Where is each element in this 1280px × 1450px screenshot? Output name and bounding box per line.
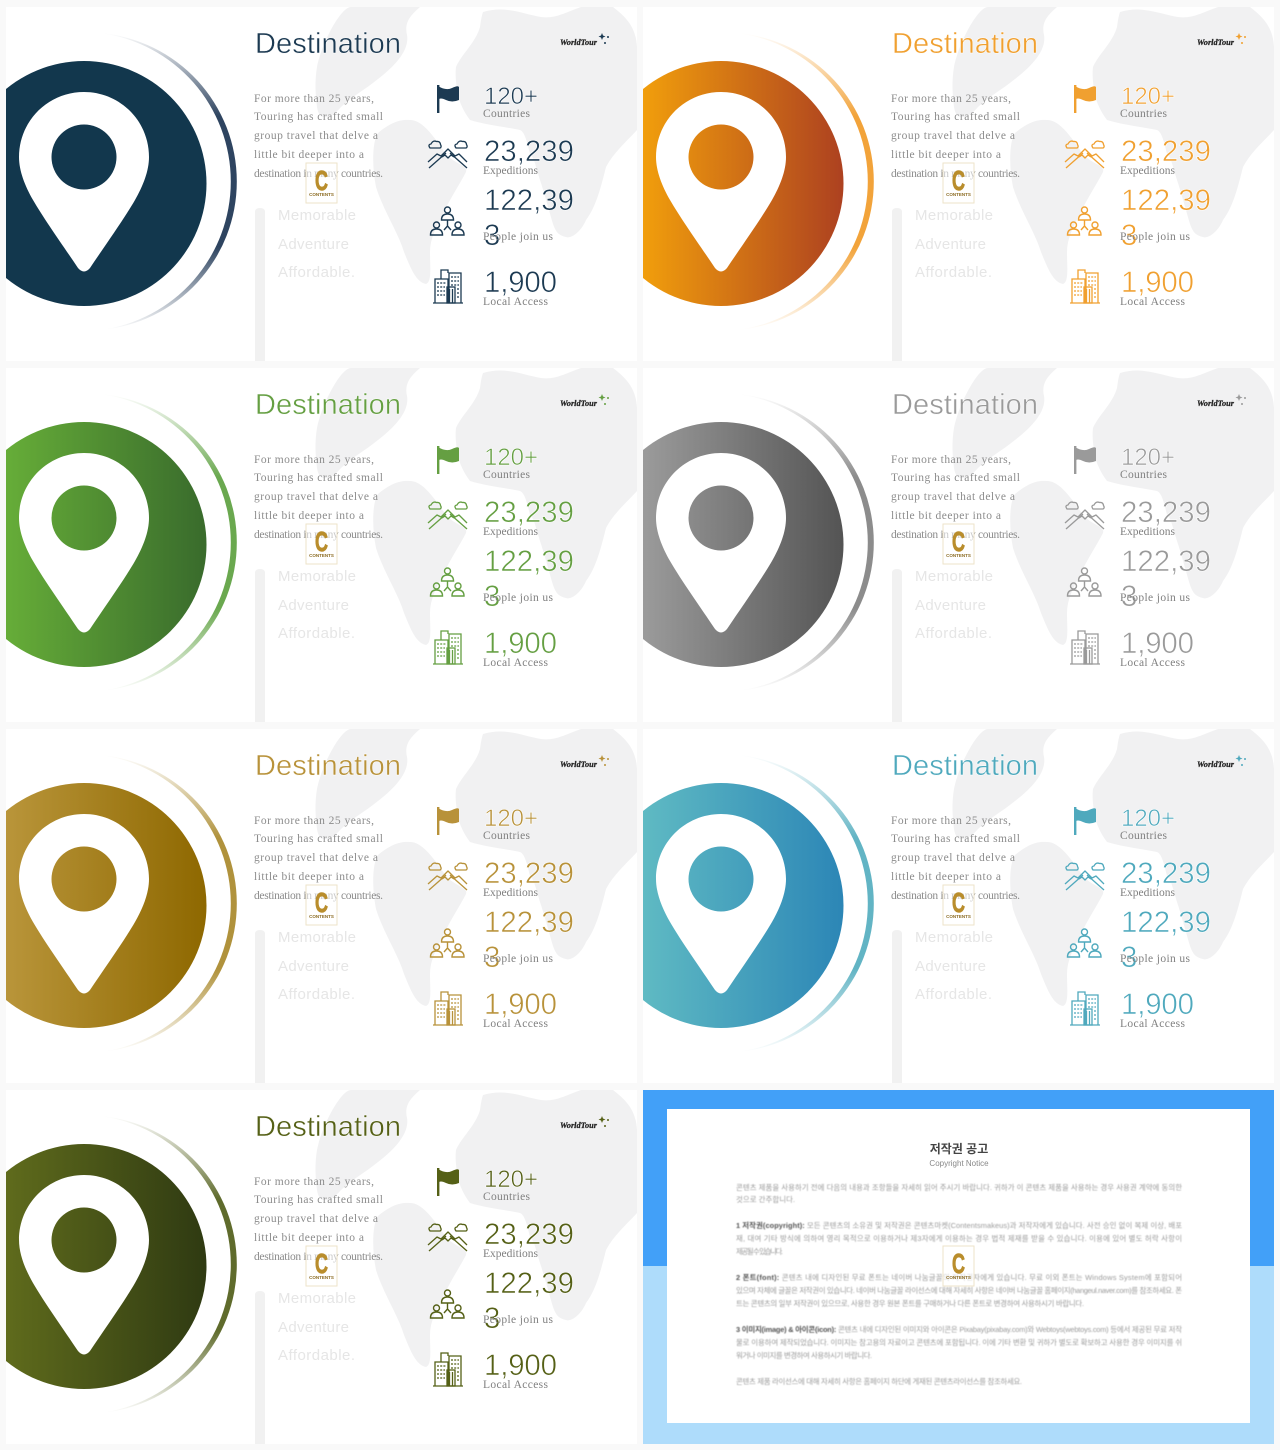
stat: people: People join us: [483, 592, 554, 604]
watermark badge: CONTENTS: [309, 192, 334, 197]
stat: local access: 1,900: [1121, 988, 1194, 1021]
stat: people: 122,39: [484, 906, 574, 939]
white notice card: [667, 1109, 1250, 1423]
stat: local access: Local Access: [483, 1379, 549, 1391]
stat: people: 3: [1121, 941, 1137, 974]
stat: expeditions: Expeditions: [483, 887, 539, 899]
section: image and icon: [736, 1325, 1182, 1360]
stat: countries: 120+: [484, 805, 538, 832]
stat: expeditions: [428, 857, 574, 899]
intro paragraph: group travel that delve a: [254, 852, 378, 864]
icon: map pin: [656, 453, 786, 632]
intro paragraph: Touring has crafted small: [254, 833, 383, 845]
intro paragraph: [891, 93, 1020, 180]
brand logo: [1197, 394, 1246, 408]
brand logo: WorldTour: [560, 399, 598, 408]
keywords list: Affordable.: [915, 264, 992, 281]
stat: local access: [433, 266, 557, 308]
brand logo: WorldTour: [1197, 38, 1235, 47]
gradient circle: [0, 422, 206, 667]
closing line: 콘텐츠 제품 라이선스에 대해 자세히 사항은 홈페이지 하단에 게재된 콘텐츠라이선스를 참조하세요.: [736, 1377, 1022, 1386]
keywords list: Adventure: [278, 236, 349, 253]
brand logo: [560, 755, 609, 769]
world map background: [316, 1090, 637, 1367]
stat: people: People join us: [1120, 592, 1191, 604]
crescent ring: [100, 755, 237, 1052]
stat: local access: [1070, 988, 1194, 1030]
watermark badge: CONTENTS: [946, 192, 971, 197]
intro notice: 콘텐츠 제품을 사용하기 전에 다음의 내용과 조항들을 자세히 읽어 주시기 바랍니다. 귀하가 이 콘텐츠 제품을 사용하는 경우 사용권 계약에 동의한: [736, 1183, 1182, 1192]
stat: local access: Local Access: [483, 296, 549, 308]
keywords list: Memorable: [278, 207, 356, 224]
watermark badge: [943, 524, 974, 564]
stat: countries: [1074, 805, 1175, 842]
keywords list: Adventure: [278, 597, 349, 614]
intro paragraph: little bit deeper into a: [254, 1232, 364, 1244]
icon: map pin: [656, 92, 786, 272]
intro paragraph: [891, 815, 1020, 902]
stat: local access: Local Access: [483, 657, 549, 669]
stat: countries: 120+: [1121, 444, 1175, 471]
keywords list: [915, 929, 993, 1003]
notice heading: 저작권 공고: [930, 1141, 988, 1156]
stat: expeditions: [1065, 135, 1211, 177]
stat: countries: [437, 1166, 538, 1203]
crescent ring: [737, 394, 874, 691]
stat: local access: 1,900: [484, 266, 557, 299]
keywords list: Memorable: [278, 568, 356, 585]
stat: local access: 1,900: [1121, 266, 1194, 299]
intro paragraph: destination in many countries.: [254, 1251, 383, 1263]
section: copyright: 1 저작권(copyright): 모든 콘텐츠의 소유권 및 저작권은 콘텐츠마켓(Contentsmakeus)과 저작자에게 있습니다. 사전 승인 없이 복제 이상, 배포: [736, 1221, 1182, 1230]
stat: people: 3: [484, 1302, 500, 1335]
gradient circle: [598, 422, 844, 667]
stat: local access: 1,900: [484, 988, 557, 1021]
stat: people: People join us: [1120, 231, 1191, 243]
title: Destination: [255, 389, 401, 421]
crescent ring: [100, 394, 237, 691]
watermark badge: [943, 885, 974, 925]
keywords list: Adventure: [278, 1319, 349, 1336]
keywords list: [278, 207, 356, 281]
intro paragraph: group travel that delve a: [254, 1213, 378, 1225]
brand logo: WorldTour: [1197, 399, 1235, 408]
world map background: [952, 368, 1274, 645]
panel: navy Destination slide: [6, 7, 637, 361]
stat: countries: Countries: [483, 830, 531, 842]
stat: people: 3: [484, 219, 500, 252]
intro paragraph: destination in many countries.: [254, 890, 383, 902]
keywords list: Adventure: [278, 958, 349, 975]
stat: local access: [433, 1349, 557, 1391]
stat: countries: Countries: [1120, 108, 1168, 120]
intro paragraph: destination in many countries.: [254, 529, 383, 541]
gradient circle: [0, 61, 206, 306]
stat: expeditions: [1065, 496, 1211, 538]
stat: expeditions: Expeditions: [483, 165, 539, 177]
brand logo: WorldTour: [1197, 760, 1235, 769]
intro paragraph: Touring has crafted small: [254, 472, 383, 484]
intro paragraph: destination in many countries.: [891, 529, 1020, 541]
side bar: [255, 208, 265, 361]
icon: map pin: [19, 453, 149, 632]
section: font: [736, 1273, 1182, 1308]
title: Destination: [892, 389, 1038, 421]
side bar: [255, 930, 265, 1083]
stat: people: People join us: [483, 1314, 554, 1326]
keywords list: Adventure: [915, 597, 986, 614]
brand logo: [1197, 755, 1246, 769]
intro paragraph: Touring has crafted small: [891, 472, 1020, 484]
intro paragraph: group travel that delve a: [891, 852, 1015, 864]
watermark badge: C: [952, 887, 965, 918]
keywords list: Affordable.: [915, 625, 992, 642]
intro paragraph: [254, 1176, 383, 1263]
stat: countries: [1074, 444, 1175, 481]
intro paragraph: For more than 25 years,: [254, 1176, 374, 1188]
stat: people: People join us: [483, 953, 554, 965]
intro paragraph: Touring has crafted small: [891, 833, 1020, 845]
blue upper band: [643, 1090, 1274, 1266]
intro paragraph: Touring has crafted small: [254, 111, 383, 123]
intro paragraph: [254, 815, 383, 902]
stat: expeditions: 23,239: [1121, 496, 1211, 529]
stat: people: [1068, 184, 1211, 252]
stat: people: [1068, 545, 1211, 613]
crescent ring: [100, 33, 237, 330]
stat: people: [430, 545, 574, 613]
intro paragraph: For more than 25 years,: [254, 93, 374, 105]
stat: people: [430, 184, 574, 252]
side bar: [892, 208, 902, 361]
stat: countries: Countries: [483, 469, 531, 481]
stat: expeditions: 23,239: [1121, 857, 1211, 890]
watermark badge: CONTENTS: [946, 553, 971, 558]
keywords list: [278, 929, 356, 1003]
section: font: 있으며 자체에 글꼴은 저작권이 있습니다. 네이버 나눔글꼴 라이선스에 대해 자세히 사항은 네이버 나눔글꼴 홈페이지(hangeul.naver.com)를 참조하세요. 폰: [736, 1286, 1182, 1295]
stat: expeditions: 23,239: [1121, 135, 1211, 168]
intro paragraph: destination in many countries.: [891, 890, 1020, 902]
keywords list: [915, 568, 993, 642]
stat: countries: 120+: [484, 1166, 538, 1193]
watermark badge: CONTENTS: [309, 914, 334, 919]
stat: expeditions: Expeditions: [483, 526, 539, 538]
icon: map pin: [19, 814, 149, 994]
stat: countries: 120+: [1121, 83, 1175, 110]
keywords list: Affordable.: [278, 625, 355, 642]
crescent ring: [100, 1116, 237, 1413]
stat: people: [430, 906, 574, 974]
intro paragraph: little bit deeper into a: [891, 149, 1001, 161]
section: image and icon: 물로 이용하여 제작되었습니다. 이미지는 참고용의 자료이고 콘텐츠에 포함됩니다. 이에 기타 변환 및 귀하가 별도로 확보하고 사용한 경우 이미지를 쉬: [736, 1338, 1182, 1347]
title: Destination: [255, 28, 401, 60]
keywords list: Affordable.: [278, 264, 355, 281]
stat: local access: 1,900: [1121, 627, 1194, 660]
stat: countries: 120+: [1121, 805, 1175, 832]
watermark badge: C: [315, 1248, 328, 1279]
keywords list: Memorable: [915, 929, 993, 946]
world map background: [316, 729, 637, 1006]
stat: local access: [1070, 266, 1194, 308]
stat: countries: Countries: [1120, 830, 1168, 842]
stat: people: People join us: [1120, 953, 1191, 965]
stat: expeditions: Expeditions: [483, 1248, 539, 1260]
watermark badge: [306, 1246, 337, 1286]
keywords list: [915, 207, 993, 281]
intro paragraph: Touring has crafted small: [891, 111, 1020, 123]
brand logo: [560, 33, 609, 47]
section: image and icon: 워거나 이미지를 변경하여 사용하시기 바랍니다.: [736, 1351, 872, 1360]
intro paragraph: destination in many countries.: [254, 168, 383, 180]
side bar: [255, 1291, 265, 1444]
intro paragraph: For more than 25 years,: [891, 454, 1011, 466]
keywords list: Affordable.: [915, 986, 992, 1003]
keywords list: Affordable.: [278, 986, 355, 1003]
intro paragraph: group travel that delve a: [254, 491, 378, 503]
intro paragraph: [891, 454, 1020, 541]
panel: gold Destination slide: [6, 729, 637, 1083]
gradient circle: [598, 61, 844, 306]
stat: people: 3: [484, 580, 500, 613]
panel: teal Destination slide: [643, 729, 1274, 1083]
stat: expeditions: [428, 496, 574, 538]
keywords list: Affordable.: [278, 1347, 355, 1364]
keywords list: Memorable: [915, 207, 993, 224]
gradient circle: [0, 783, 206, 1028]
intro paragraph: little bit deeper into a: [891, 871, 1001, 883]
stat: local access: Local Access: [483, 1018, 549, 1030]
stat: people: 122,39: [484, 184, 574, 217]
title: Destination: [255, 750, 401, 782]
stat: people: People join us: [483, 231, 554, 243]
world map background: [316, 368, 637, 645]
watermark badge: [306, 524, 337, 564]
section: font: 트는 콘텐츠의 일부 저작권이 있으므로, 사용한 경우 원본 폰트를 구매하거나 다른 폰트로 변경하여 사용하시기 바랍니다.: [736, 1299, 1084, 1308]
watermark badge: C: [952, 1248, 965, 1279]
section: font: 2 폰트(font): 콘텐츠 내에 디자인된 무료 폰트는 네이버 나눔글꼴의 저작권자에게 있습니다. 무료 이외 폰트는 Windows System에 포함되어: [736, 1273, 1182, 1282]
world map background: [952, 7, 1274, 284]
panel: green Destination slide: [6, 368, 637, 722]
world map background: [316, 7, 637, 284]
gradient circle: [598, 783, 844, 1028]
intro paragraph: [254, 454, 383, 541]
watermark badge: C: [315, 526, 328, 557]
intro paragraph: little bit deeper into a: [254, 871, 364, 883]
section: image and icon: 3 이미지(image) & 아이콘(icon): 콘텐츠 내에 디자인된 이미지와 아이콘은 Pixabay(pixabay.com)와 Webtoys(webtoys.com) 등에서 제공된 무료 저작: [736, 1325, 1182, 1334]
intro paragraph: group travel that delve a: [891, 130, 1015, 142]
watermark badge: C: [315, 887, 328, 918]
stat: people: 122,39: [1121, 906, 1211, 939]
stat: local access: Local Access: [1120, 657, 1186, 669]
watermark badge: CONTENTS: [309, 1275, 334, 1280]
keywords list: Memorable: [278, 929, 356, 946]
watermark badge: C: [952, 165, 965, 196]
stat: expeditions: 23,239: [484, 857, 574, 890]
stat: people: 122,39: [484, 545, 574, 578]
stat: local access: Local Access: [1120, 296, 1186, 308]
stat: countries: 120+: [484, 444, 538, 471]
stat: expeditions: [428, 1218, 574, 1260]
stat: countries: [437, 444, 538, 481]
stat: countries: [1074, 83, 1175, 120]
intro paragraph: destination in many countries.: [891, 168, 1020, 180]
keywords list: Memorable: [915, 568, 993, 585]
gradient circle: [0, 1144, 206, 1389]
intro notice: [736, 1183, 1182, 1204]
panel: copyright notice: [643, 1090, 1274, 1444]
brand logo: [1197, 33, 1246, 47]
stat: expeditions: [1065, 857, 1211, 899]
stat: expeditions: Expeditions: [1120, 526, 1176, 538]
panel: olive Destination slide: [6, 1090, 637, 1444]
stat: expeditions: 23,239: [484, 1218, 574, 1251]
icon: map pin: [656, 814, 786, 994]
stat: people: 122,39: [484, 1267, 574, 1300]
brand logo: [560, 1116, 609, 1130]
icon: map pin: [19, 1175, 149, 1354]
keywords list: [278, 1290, 356, 1364]
stat: local access: [433, 627, 557, 669]
intro paragraph: For more than 25 years,: [254, 815, 374, 827]
stat: local access: 1,900: [484, 1349, 557, 1382]
watermark badge: CONTENTS: [946, 1275, 971, 1280]
title: Destination: [892, 750, 1038, 782]
intro paragraph: For more than 25 years,: [254, 454, 374, 466]
side bar: [255, 569, 265, 722]
intro paragraph: group travel that delve a: [254, 130, 378, 142]
watermark badge: CONTENTS: [309, 553, 334, 558]
side bar: [892, 930, 902, 1083]
icon: map pin: [19, 92, 149, 272]
stat: people: 122,39: [1121, 184, 1211, 217]
section: copyright: 제공될 수 있습니다.: [736, 1247, 783, 1256]
stat: local access: [1070, 627, 1194, 669]
intro paragraph: For more than 25 years,: [891, 815, 1011, 827]
stat: countries: Countries: [1120, 469, 1168, 481]
stat: people: 3: [1121, 580, 1137, 613]
intro paragraph: little bit deeper into a: [891, 510, 1001, 522]
intro paragraph: little bit deeper into a: [254, 510, 364, 522]
stat: local access: [433, 988, 557, 1030]
side bar: [892, 569, 902, 722]
stat: countries: [437, 83, 538, 120]
keywords list: Memorable: [278, 1290, 356, 1307]
stat: expeditions: Expeditions: [1120, 165, 1176, 177]
crescent ring: [737, 33, 874, 330]
watermark badge: [943, 1246, 974, 1286]
stat: people: 3: [1121, 219, 1137, 252]
brand logo: [560, 394, 609, 408]
stat: expeditions: 23,239: [484, 496, 574, 529]
intro paragraph: little bit deeper into a: [254, 149, 364, 161]
stat: local access: Local Access: [1120, 1018, 1186, 1030]
intro notice: 것으로 간주합니다.: [736, 1195, 795, 1204]
crescent ring: [737, 755, 874, 1052]
stat: countries: [437, 805, 538, 842]
stat: expeditions: Expeditions: [1120, 887, 1176, 899]
brand logo: WorldTour: [560, 38, 598, 47]
intro paragraph: Touring has crafted small: [254, 1194, 383, 1206]
keywords list: [278, 568, 356, 642]
watermark badge: [943, 163, 974, 203]
stat: people: 122,39: [1121, 545, 1211, 578]
intro paragraph: [254, 93, 383, 180]
title: Destination: [255, 1111, 401, 1143]
keywords list: Adventure: [915, 236, 986, 253]
stat: countries: 120+: [484, 83, 538, 110]
stat: countries: Countries: [483, 108, 531, 120]
brand logo: WorldTour: [560, 1121, 598, 1130]
stat: people: [1068, 906, 1211, 974]
world map background: [952, 729, 1274, 1006]
intro paragraph: For more than 25 years,: [891, 93, 1011, 105]
section: copyright: 재, 대여 기타 방식에 의하여 영리 목적으로 이용하거나 제3자에게 이용하는 경우 법적 제재를 받을 수 있습니다. 이용에 있어 별도 허락 사항이: [736, 1234, 1182, 1243]
panel: orange Destination slide: [643, 7, 1274, 361]
brand logo: WorldTour: [560, 760, 598, 769]
watermark badge: [306, 885, 337, 925]
watermark badge: C: [952, 526, 965, 557]
panel: grey Destination slide: [643, 368, 1274, 722]
stat: expeditions: [428, 135, 574, 177]
stat: expeditions: 23,239: [484, 135, 574, 168]
stat: people: [430, 1267, 574, 1335]
watermark badge: [306, 163, 337, 203]
intro paragraph: group travel that delve a: [891, 491, 1015, 503]
watermark badge: C: [315, 165, 328, 196]
notice subheading: Copyright Notice: [929, 1159, 989, 1168]
stat: local access: 1,900: [484, 627, 557, 660]
stat: countries: Countries: [483, 1191, 531, 1203]
stat: people: 3: [484, 941, 500, 974]
section: copyright: [736, 1221, 1182, 1256]
watermark badge: CONTENTS: [946, 914, 971, 919]
title: Destination: [892, 28, 1038, 60]
keywords list: Adventure: [915, 958, 986, 975]
